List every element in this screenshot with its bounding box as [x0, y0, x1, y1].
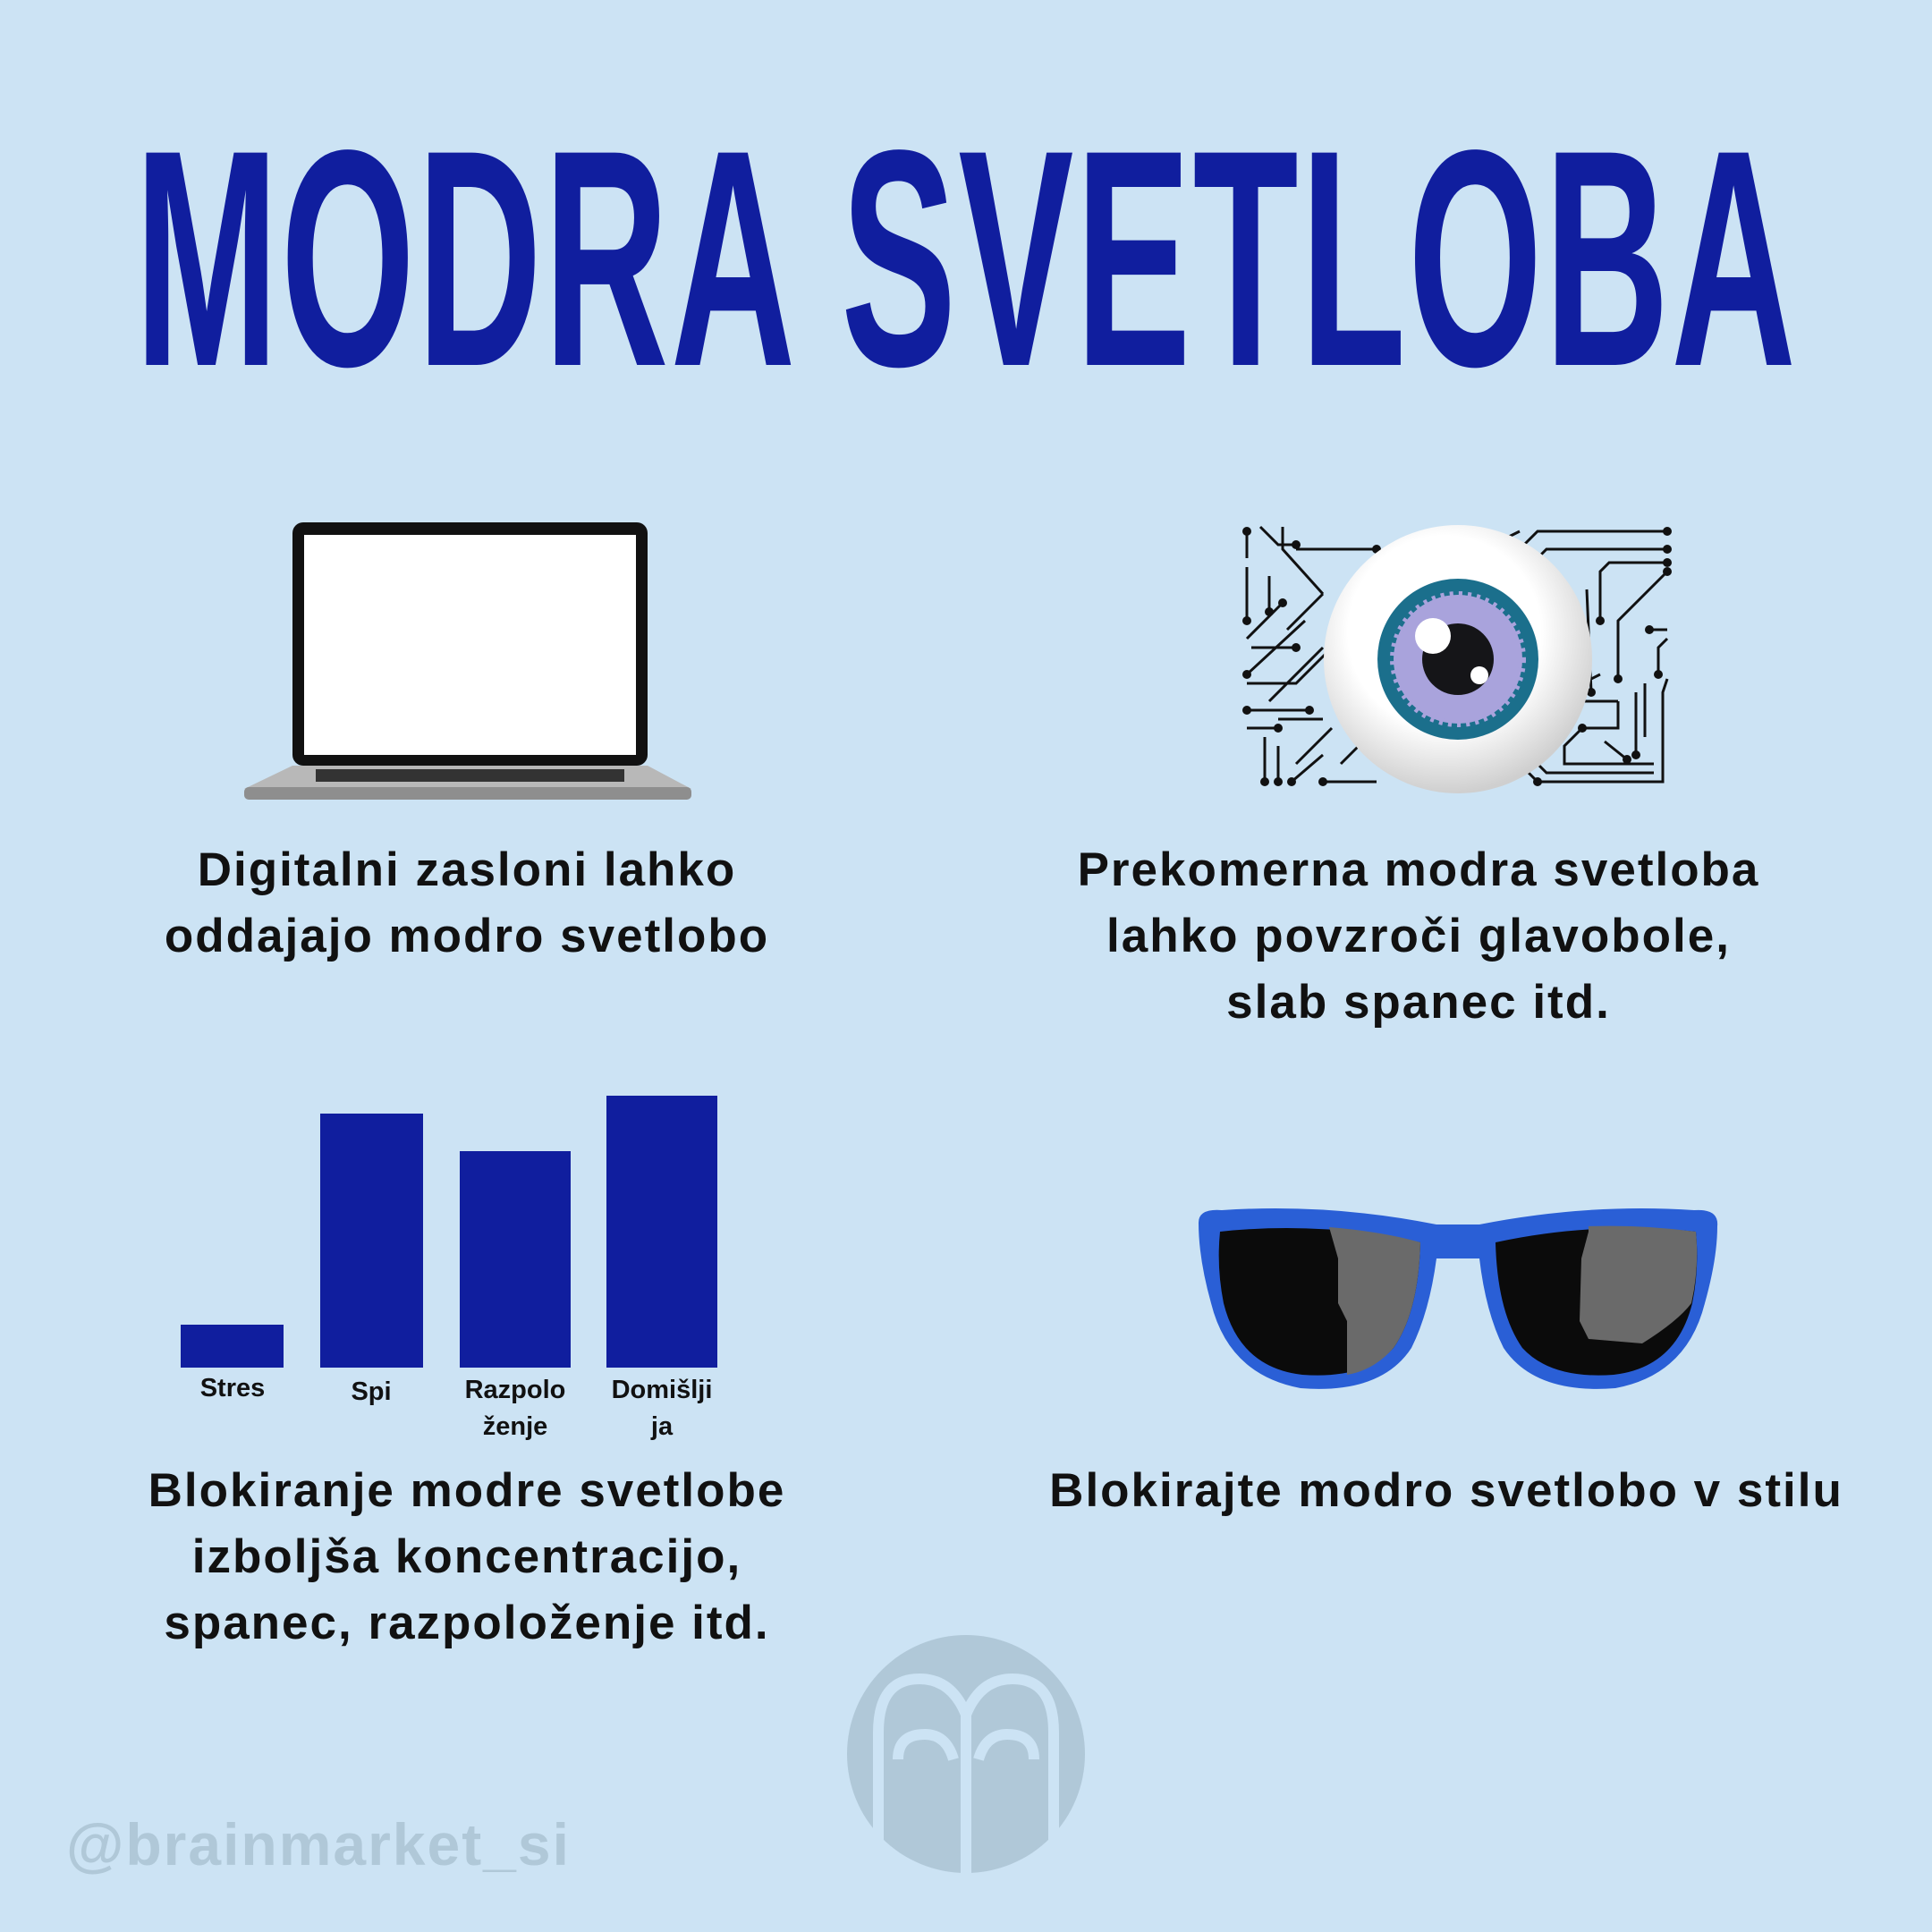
label: Domišljija	[612, 1376, 712, 1441]
text: excess blue light: slab spanec itd.	[1226, 976, 1611, 1029]
label: Stres: Stres	[200, 1374, 265, 1402]
bar: Stres	[181, 1325, 284, 1368]
icon: sunglasses	[1199, 1208, 1717, 1389]
text: blocking benefits: spanec, razpoloženje itd.	[164, 1597, 770, 1649]
label: Razpoloženje: ženje	[483, 1412, 547, 1441]
label: Spi: Spi	[351, 1377, 392, 1406]
label: Razpoloženje	[465, 1376, 565, 1441]
text: block in style: Blokirajte modro svetlobo v stilu	[1049, 1464, 1843, 1517]
watermark handle: @brainmarket_si	[66, 1811, 571, 1877]
text: blocking benefits: Blokiranje modre svetlobe	[148, 1464, 785, 1517]
logo	[847, 1635, 1085, 1873]
text: screens: oddajajo modro svetlobo	[165, 910, 769, 962]
icon: laptop	[244, 522, 691, 800]
text: blocking benefits	[148, 1464, 785, 1649]
icon: eye with circuit	[1242, 525, 1672, 793]
text: excess blue light: Prekomerna modra svetloba	[1078, 843, 1759, 896]
bar: Spi	[320, 1114, 423, 1368]
label: Domišljija: ja	[651, 1412, 673, 1441]
text: screens: Digitalni zasloni lahko	[198, 843, 736, 896]
bar: Domišljija	[606, 1096, 717, 1368]
title: MODRA SVETLOBA	[134, 87, 1798, 431]
bar: Razpoloženje	[460, 1151, 571, 1368]
text: excess blue light	[1078, 843, 1759, 1029]
bar chart	[181, 1096, 717, 1441]
label: Domišljija: Domišlji	[612, 1376, 712, 1404]
label: Razpoloženje: Razpolo	[465, 1376, 565, 1404]
text: excess blue light: lahko povzroči glavobole,	[1106, 910, 1731, 962]
text: blocking benefits: izboljša koncentracijo,	[192, 1530, 741, 1583]
text: screens	[165, 843, 769, 962]
